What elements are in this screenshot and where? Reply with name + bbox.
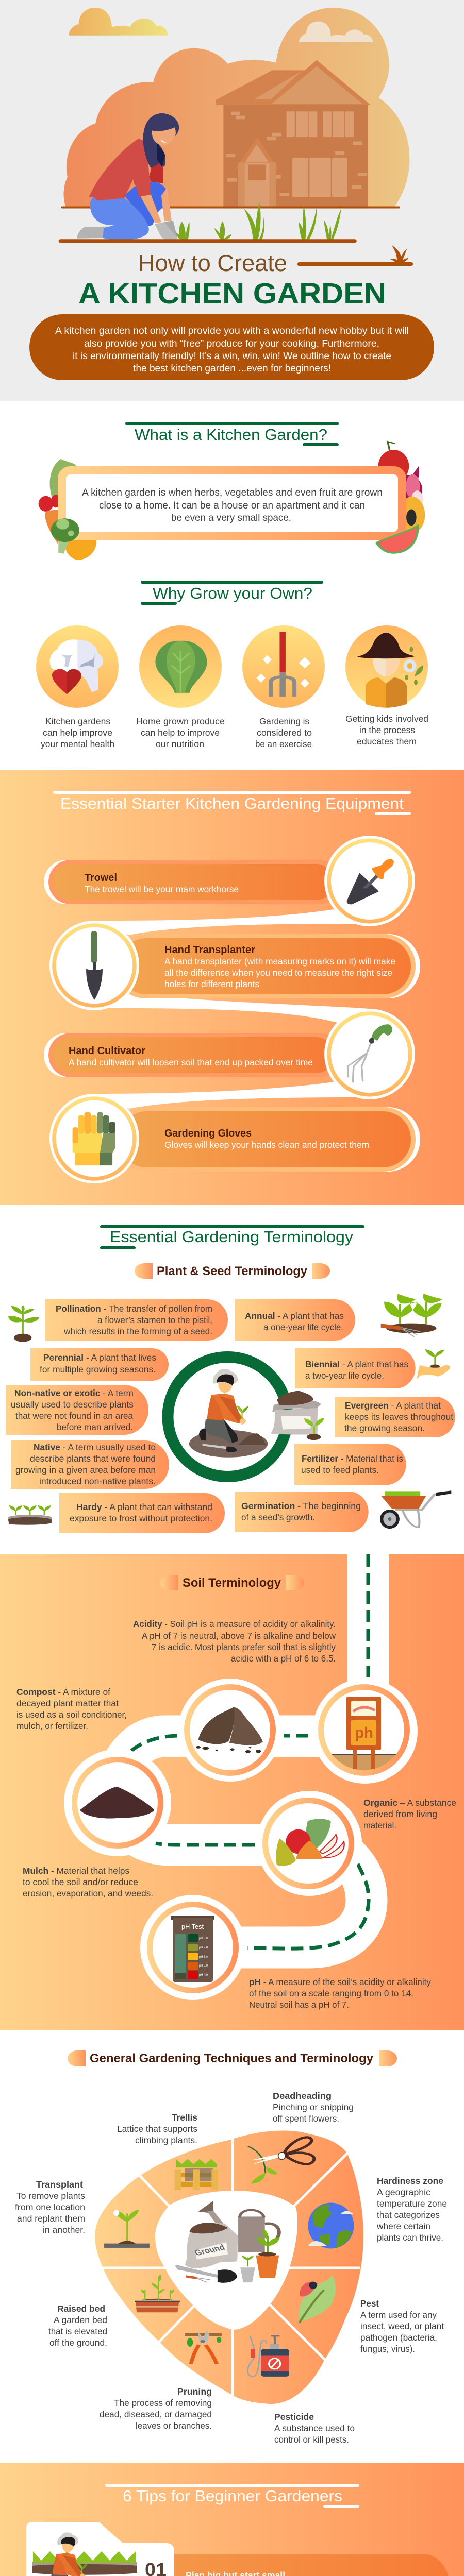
text: benefit captions: Kitchen gardens: [45, 716, 110, 726]
text: hardiness zone: temperature zone: [377, 2198, 447, 2209]
panel: hero: [0, 0, 464, 401]
heading: Why Grow your Own?: [141, 581, 323, 605]
heading: Essential Gardening Terminology: [100, 1225, 364, 1249]
text: pH: Neutral soil has a pH of 7.: [249, 1999, 349, 2010]
text: mulch: erosion, evaporation, and weeds.: [23, 1888, 153, 1899]
heading: Essential Gardening Terminology: Essential Gardening Terminology: [110, 1228, 354, 1246]
subheading: general gardening techniques: General Gardening Techniques and Terminology: [90, 2052, 374, 2065]
term: germination: [235, 1492, 369, 1532]
icon: title ground and grass: [297, 245, 413, 266]
text: pest: fungus, virus).: [360, 2344, 415, 2354]
card: hand transplanter: [49, 921, 420, 1010]
text: pruning: The process of removing: [114, 2398, 212, 2408]
icon: plants with rake: [381, 1294, 443, 1337]
term: non-native or exotic: [6, 1385, 148, 1435]
term: annual: a one-year life cycle.: [263, 1322, 343, 1332]
title: A KITCHEN GARDEN: [78, 277, 386, 310]
text: pest: insect, weed, or plant: [360, 2321, 444, 2331]
text: trellis: Trellis: [172, 2112, 197, 2123]
text: pesticide: Pesticide: [274, 2412, 314, 2422]
card: hand transplanter: all the difference when you need to measure the right size: [164, 968, 392, 978]
icon: brain and heart: [36, 625, 119, 708]
text: benefit captions: Getting kids involved: [345, 714, 428, 724]
circle: pH test kit: [140, 1895, 245, 2000]
subheading: soil terminology: Soil Terminology: [183, 1576, 281, 1590]
text: pH: [249, 1977, 431, 2010]
path: green dashes: [131, 1554, 369, 1948]
text: benefit captions: can help improve: [43, 727, 112, 738]
text: trellis: Lattice that supports: [117, 2124, 197, 2134]
text: raised bed: A garden bed: [54, 2315, 107, 2325]
central ring with farmer: [168, 1357, 324, 1477]
term: hardy: exposure to frost without protection.: [70, 1513, 212, 1523]
frame with text: be even a very small space.: [171, 512, 291, 523]
text: transplant: Transplant: [36, 2179, 83, 2190]
circle: pH test kit: pH 8.0: [199, 1937, 208, 1940]
term: germination: of a seed’s growth.: [241, 1512, 315, 1522]
text: pesticide: control or kill pests.: [274, 2434, 349, 2445]
heading: Why Grow your Own?: Why Grow your Own?: [153, 584, 312, 602]
text: pruning: dead, diseased, or damaged: [100, 2409, 212, 2419]
text: organic: material.: [363, 1820, 396, 1831]
card: hand cultivator: Hand Cultivator: [69, 1045, 145, 1057]
text: benefit captions: Home grown produce: [136, 716, 225, 726]
term: non-native or exotic: that were not found in an area: [15, 1411, 133, 1421]
panel: 6 tips: [0, 2463, 464, 2576]
heading: What is a Kitchen Garden?: [125, 422, 339, 446]
illustration: woman gardening in front of a house: [59, 8, 409, 243]
text: compost: decayed plant matter that: [16, 1698, 119, 1708]
card: trowel: The trowel will be your main workhorse: [85, 884, 239, 894]
heading: 6 tips: 6 Tips for Beginner Gardeners: [123, 2487, 342, 2505]
text: organic: Organic – A substance: [363, 1798, 456, 1808]
icon: ladybug on leaf: [299, 2275, 336, 2323]
icon: hand cultivator: [347, 1024, 392, 1082]
text: compost: Compost - A mixture of: [16, 1687, 110, 1697]
path: white road between soil terms: [118, 1554, 368, 1947]
term: biennial: [295, 1348, 416, 1388]
term: non-native or exotic: Non-native or exotic - A term: [14, 1388, 134, 1398]
intro text pill: also provide you with “free” produce for your cooking. Furthermore,: [84, 338, 379, 349]
text: hardiness zone: Hardiness zone: [377, 2176, 443, 2186]
icon: sprouts in soil: [8, 1505, 52, 1525]
text: transplant: and replant them: [17, 2213, 85, 2224]
term: non-native or exotic: before man arrived.: [57, 1422, 133, 1432]
text: pruning: Pruning: [177, 2386, 212, 2397]
text: deadheading: [273, 2091, 354, 2124]
text: benefit captions: Gardening is: [259, 716, 309, 726]
term: native: introduced non-native plants.: [39, 1476, 156, 1486]
text: trellis: [117, 2112, 197, 2145]
icon: garden fork: [242, 625, 325, 708]
intro text pill: A kitchen garden not only will provide you with a wonderful new hobby but it will: [55, 325, 409, 336]
intro text pill: it is environmentally friendly! It’s a win, win, win! We outline how to create: [73, 350, 391, 362]
icon: pesticide sprayer: [247, 2336, 289, 2377]
text: raised bed: off the ground.: [49, 2337, 107, 2348]
card: gardening gloves: [49, 1094, 420, 1183]
text: pest: [360, 2298, 444, 2354]
text: transplant: in another.: [43, 2225, 85, 2235]
subheading: plant and seed terminology: Plant & Seed Terminology: [157, 1264, 308, 1278]
heading: equipment: [53, 791, 411, 815]
text: pesticide: A substance used to: [274, 2423, 355, 2433]
card: hand transplanter: A hand transplanter (with measuring marks on it) will make: [164, 956, 395, 967]
text: transplant: To remove plants: [16, 2191, 85, 2201]
title: How to Create: [138, 250, 287, 276]
panel: techniques wheel: [15, 2091, 447, 2445]
term: non-native or exotic: usually used to describe plants: [11, 1399, 134, 1410]
text: pest: A term used for any: [360, 2310, 437, 2320]
card: hand transplanter: Hand Transplanter: [164, 944, 255, 956]
panel: soil terminology: [0, 1554, 464, 2030]
circle: organic produce: [257, 1791, 362, 1896]
panel: essential equipment: [0, 770, 464, 1205]
icon: trowel: [347, 859, 394, 904]
term: native: [11, 1440, 169, 1489]
card: hand cultivator: A hand cultivator will loosen soil that end up packed over time: [69, 1057, 313, 1067]
text: mulch: [23, 1866, 153, 1899]
term: biennial: Biennial - A plant that has: [305, 1359, 408, 1369]
text: hardiness zone: [376, 2176, 447, 2243]
icon: scissors cutting stem: [248, 2137, 314, 2184]
text: compost: mulch, or fertilizer.: [16, 1721, 88, 1731]
icon: seedling: [8, 1305, 39, 1342]
term: hardy: [59, 1493, 225, 1533]
circle: pH test kit: pH Test: [181, 1923, 204, 1930]
icon: lettuce: [139, 625, 222, 708]
icon: farmer with seedlings: [32, 2532, 137, 2576]
term: evergreen: [335, 1397, 455, 1437]
term: perennial: [30, 1348, 169, 1381]
heading: What is a Kitchen Garden?: What is a Kitchen Garden?: [135, 426, 327, 444]
icon: wheelbarrow: [380, 1490, 451, 1529]
text: benefit captions: can help to improve: [141, 727, 220, 738]
text: pest: Pest: [360, 2298, 379, 2309]
circle: pH sign: ph: [355, 1724, 373, 1741]
term: evergreen: the growing season.: [344, 1423, 425, 1433]
panel: why grow your own benefits: [36, 625, 428, 749]
card: hand transplanter: holes for different plants: [164, 979, 259, 989]
icon: pruning shears: [185, 2330, 222, 2364]
intro text pill: the best kitchen garden ...even for beginners!: [133, 363, 331, 374]
card: gardening gloves: Gloves will keep your hands clean and protect them: [164, 1140, 369, 1150]
text: benefit captions: educates them: [357, 736, 417, 747]
text: raised bed: [48, 2303, 107, 2348]
term: perennial: for multiple growing seasons.: [40, 1364, 156, 1375]
term: germination: Germination - The beginning: [241, 1501, 361, 1511]
term: hardy: Hardy - A plant that can withstand: [76, 1502, 212, 1512]
text: acidity: acidic with a pH of 6 to 6.5.: [231, 1653, 336, 1664]
term: pollination: which results in the forming of a seed.: [63, 1326, 212, 1336]
term: evergreen: Evergreen - A plant that: [345, 1400, 441, 1411]
term: pollination: [45, 1299, 228, 1341]
text: benefit captions: our nutrition: [156, 739, 204, 749]
text: mulch: Mulch - Material that helps: [23, 1866, 129, 1876]
icon: gloves: [73, 1112, 115, 1165]
card: hand cultivator: [44, 1009, 415, 1099]
text: benefit captions: [41, 714, 428, 749]
text: deadheading: Pinching or snipping: [273, 2102, 354, 2112]
icon: hand holding sprout: [417, 1349, 450, 1380]
text: benefit captions: in the process: [359, 725, 415, 735]
text: pruning: [100, 2386, 212, 2431]
frame with text: A kitchen garden is when herbs, vegetables and even fruit are grown: [82, 487, 383, 498]
term: annual: [235, 1299, 355, 1341]
circle: pH test kit: pH 6.0: [199, 1956, 208, 1959]
frame with text: [62, 470, 402, 536]
circle: pH test kit: pH 7.0: [199, 1946, 208, 1950]
text: organic: [363, 1798, 456, 1831]
text: mulch: to cool the soil and/or reduce: [23, 1877, 138, 1887]
text: deadheading: off spent flowers.: [273, 2113, 339, 2124]
text: transplant: [15, 2179, 85, 2235]
text: pesticide: [274, 2412, 355, 2445]
card: gardening gloves: Gardening Gloves: [164, 1128, 252, 1139]
icon: globe: [308, 2203, 354, 2248]
text: transplant: from one location: [15, 2202, 85, 2212]
text: deadheading: Deadheading: [273, 2091, 332, 2101]
text: benefit captions: considered to: [257, 727, 312, 738]
term: evergreen: keeps its leaves throughout: [345, 1412, 453, 1422]
term: native: Native - A term usually used to: [34, 1442, 156, 1452]
intro text pill: [29, 314, 434, 380]
term: fertilizer: used to feed plants.: [301, 1465, 379, 1475]
term: biennial: a two-year life cycle.: [305, 1370, 384, 1381]
circle: pH sign: [312, 1679, 418, 1784]
text: acidity: [133, 1619, 336, 1664]
chart: segmented egg wheel: [95, 2130, 363, 2404]
text: trellis: climbing plants.: [135, 2135, 197, 2145]
text: hardiness zone: that categorizes: [377, 2210, 440, 2220]
icon: center garden tools: [175, 2201, 279, 2283]
term: fertilizer: [294, 1444, 406, 1485]
subheading: soil terminology: [160, 1575, 304, 1590]
term: perennial: Perennial - A plant that lives: [43, 1352, 156, 1363]
icon: transplant seedling: [104, 2210, 150, 2248]
frame with text: close to a home. It can be a house or an apartment and it can: [99, 500, 365, 511]
icon: hand transplanter: [86, 931, 103, 1000]
text: compost: [16, 1687, 127, 1731]
icon: center garden tools: Ground: [193, 2243, 226, 2258]
text: pH: of the soil on a scale ranging from 0 to 14.: [249, 1988, 413, 1998]
text: raised bed: that is elevated: [48, 2326, 107, 2336]
text: pruning: leaves or branches.: [136, 2420, 212, 2431]
term: pollination: Pollination - The transfer of pollen from: [56, 1303, 212, 1314]
term: annual: Annual - A plant that has: [245, 1311, 344, 1321]
connectors between tools: [97, 909, 370, 1109]
circle: soil pile: [64, 1749, 171, 1856]
panel: plant and seed terms: [6, 1294, 455, 1533]
text: hardiness zone: plants can thrive.: [377, 2232, 443, 2243]
term: pollination: a flower’s stamen to the pistil,: [97, 1315, 212, 1325]
text: hardiness zone: where certain: [376, 2221, 430, 2231]
text: hardiness zone: A geographic: [377, 2187, 430, 2197]
circle: pH test kit: pH 4.0: [199, 1974, 208, 1977]
term: fertilizer: Fertilizer - Material that is: [302, 1453, 403, 1464]
tip 1: [25, 2522, 450, 2576]
icon: raised bed: [135, 2275, 180, 2312]
text: compost: is used as a soil conditioner,: [16, 1709, 127, 1720]
title: [78, 250, 386, 310]
icon: vegetables behind frame: [39, 442, 425, 560]
circle: pH test kit: pH 5.0: [199, 1964, 208, 1968]
text: benefit captions: be an exercise: [255, 739, 312, 749]
text: acidity: 7 is acidic. Most plants prefer soil that is slightly: [152, 1642, 336, 1652]
heading: 6 tips: [105, 2484, 359, 2508]
icon: person with hat: [345, 625, 428, 708]
term: native: growing in a given area before man: [15, 1465, 156, 1475]
term: native: describe plants that were found: [30, 1453, 156, 1464]
icon: trellis: [175, 2159, 218, 2190]
text: acidity: A pH of 7 is neutral, above 7 is alkaline and below: [142, 1631, 336, 1641]
circle: compost: [178, 1679, 281, 1782]
text: acidity: Acidity - Soil pH is a measure of acidity or alkalinity.: [133, 1619, 336, 1629]
text: pH: pH - A measure of the soil’s acidity or alkalinity: [249, 1977, 431, 1987]
text: benefit captions: your mental health: [41, 739, 114, 749]
card: trowel: Trowel: [85, 872, 117, 884]
panel: kitchen garden definition with vegetables: [39, 442, 425, 560]
text: pest: pathogen (bacteria,: [360, 2332, 437, 2343]
card: trowel: [44, 836, 415, 926]
text: organic: derived from living: [363, 1809, 437, 1819]
text: raised bed: Raised bed: [57, 2303, 105, 2314]
icon: broccoli and watermelon: [51, 518, 419, 554]
heading: equipment: Essential Starter Kitchen Gardening Equipment: [60, 794, 404, 812]
